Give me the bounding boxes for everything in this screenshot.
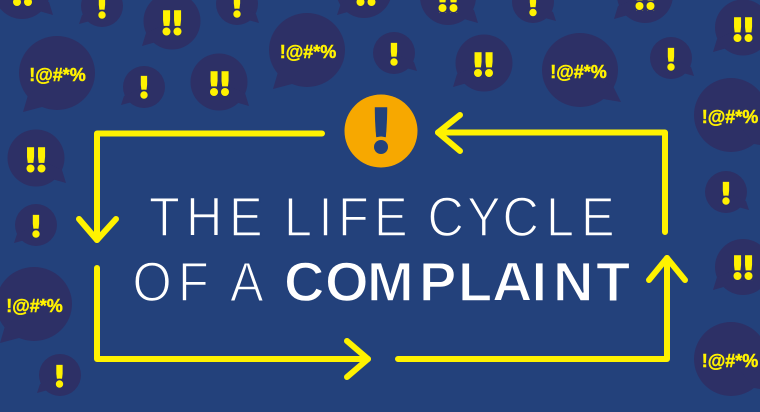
arrow: bottom left going right <box>97 268 368 377</box>
speech bubble: grawlix <box>269 13 345 89</box>
speech bubble: double exclamation left <box>8 130 66 186</box>
speech bubble: single exclamation right <box>705 171 749 213</box>
speech bubble: double exclamation top <box>614 0 673 23</box>
speech bubble: double exclamation top <box>336 0 392 18</box>
speech bubble: single exclamation bottom left <box>37 354 81 396</box>
speech bubble: single exclamation left: ! <box>29 210 43 246</box>
title line two regular: OF A <box>132 251 264 313</box>
speech bubble: single exclamation top <box>512 0 556 24</box>
title line two bold: COMPLAINT <box>284 250 630 313</box>
icon: orange alert circle: ! <box>367 96 395 168</box>
speech bubble: single exclamation <box>121 66 165 108</box>
speech bubble: double exclamation top right: !! <box>730 12 756 50</box>
title line one: THE LIFE CYCLE <box>149 186 615 248</box>
title <box>132 186 630 313</box>
speech bubble: double exclamation: !! <box>471 46 496 84</box>
arrow: bottom right going up <box>398 258 685 359</box>
speech bubble: grawlix left: !@#*% <box>29 65 86 85</box>
speech bubble: grawlix left <box>19 36 95 112</box>
speech bubble: grawlix bottom right <box>694 322 760 396</box>
speech bubble: single exclamation left <box>14 204 57 246</box>
speech bubble: grawlix left: !@#*% <box>6 296 63 316</box>
arrow: top left going down <box>79 134 322 240</box>
speech bubble: single exclamation right: ! <box>719 178 733 212</box>
speech bubble: grawlix bottom right: !@#*% <box>702 351 758 371</box>
speech bubble: single exclamation <box>373 32 417 74</box>
speech bubble: double exclamation <box>142 0 200 50</box>
speech bubble: grawlix: !@#*% <box>550 62 607 82</box>
speech bubble: double exclamation: !! <box>159 4 185 42</box>
speech bubble: grawlix left <box>0 267 72 343</box>
speech bubble: grawlix <box>542 33 621 107</box>
arrow: top right going left <box>438 115 665 232</box>
speech bubble: single exclamation: ! <box>137 72 151 106</box>
speech bubble: double exclamation <box>190 54 249 110</box>
speech bubble: single exclamation top <box>79 0 123 27</box>
speech bubble: grawlix: !@#*% <box>280 42 336 62</box>
speech bubble: double exclamation <box>453 34 512 92</box>
speech bubble: grawlix right <box>694 78 760 152</box>
speech bubble: double exclamation top <box>420 0 478 25</box>
speech bubble: single exclamation: ! <box>387 38 401 74</box>
speech bubble: grawlix right: !@#*% <box>702 107 758 127</box>
icon: orange alert circle <box>344 94 418 168</box>
speech bubble: single exclamation: ! <box>664 44 678 78</box>
speech bubble: double exclamation right: !! <box>730 250 756 288</box>
speech bubble: double exclamation top left <box>0 0 53 19</box>
speech bubble: double exclamation: !! <box>207 66 232 104</box>
speech bubble: single exclamation bottom left: ! <box>53 360 66 396</box>
speech bubble: double exclamation right <box>713 239 760 295</box>
speech bubble: single exclamation <box>650 37 694 79</box>
speech bubble: double exclamation left: !! <box>23 142 49 180</box>
speech bubble: single exclamation top <box>216 0 259 25</box>
speech bubble: double exclamation top right <box>713 0 760 56</box>
